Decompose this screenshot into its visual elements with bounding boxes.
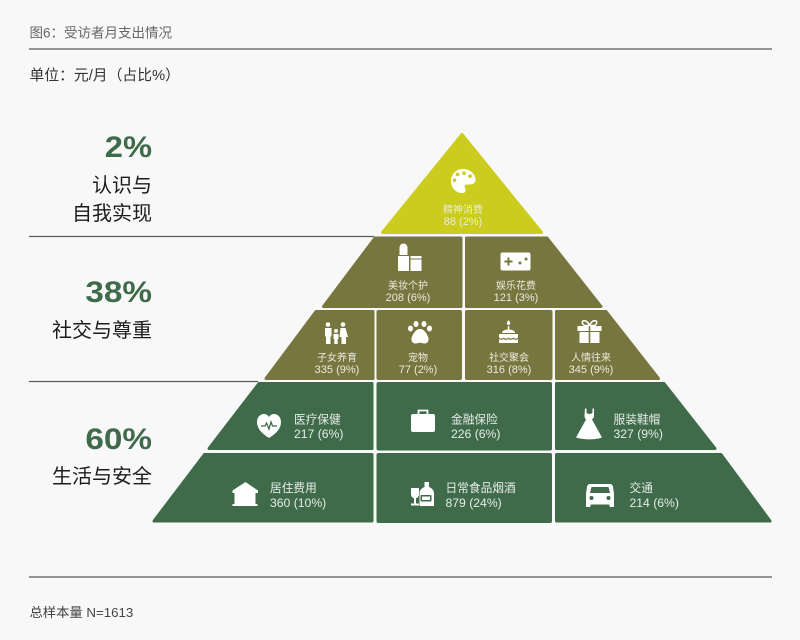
icon: game controller [500, 252, 530, 270]
label: clothing [614, 412, 663, 441]
label: spiritual spending: 精神消费 [443, 203, 483, 216]
label: healthcare: 217 (6%) [294, 427, 343, 441]
unit note: 单位：元/月（占比%） [30, 67, 180, 84]
label: gifts and favours [569, 351, 613, 376]
label: transport: 交通 [630, 481, 653, 495]
label: social gatherings: 社交聚会 [489, 351, 529, 364]
icon: briefcase [411, 410, 435, 432]
tier 2: gifts and favours [556, 312, 658, 378]
tier 3: transport [556, 454, 770, 521]
label: transport [630, 481, 679, 510]
label: childcare: 335 (9%) [315, 364, 359, 376]
label: healthcare [294, 412, 343, 441]
tier label: self-actualisation: 2% [105, 130, 152, 164]
tier label: social and respect: 38% [85, 275, 152, 309]
label: childcare: 子女养育 [317, 351, 357, 364]
label: pets: 宠物 [408, 351, 428, 364]
label: pets [399, 351, 437, 376]
tier 2: social gatherings [465, 310, 552, 380]
label: healthcare: 医疗保健 [294, 412, 341, 426]
tier label: self-actualisation: 自我实现 [72, 202, 152, 225]
icon: palette [451, 169, 476, 193]
label: finance and insurance [451, 412, 500, 441]
pyramid [154, 134, 770, 523]
tier label: social and respect [52, 275, 152, 342]
label: gifts and favours: 人情往来 [571, 351, 611, 364]
label: entertainment [494, 279, 538, 304]
label: clothing: 服装鞋帽 [614, 412, 660, 426]
tier 3: finance and insurance [376, 382, 552, 450]
label: food and drink: 879 (24%) [446, 496, 502, 510]
icon: cake [499, 320, 518, 343]
label: food and drink [446, 481, 516, 510]
tier label: life and safety: 60% [85, 422, 152, 456]
tier 1: spiritual spending [382, 134, 542, 232]
title: 图6：受访者月支出情况 [30, 26, 173, 40]
label: entertainment: 121 (3%) [494, 292, 538, 304]
label: beauty [386, 279, 430, 304]
icon: wine and bottle [411, 482, 434, 506]
icon: family [325, 322, 348, 344]
label: housing: 360 (10%) [270, 496, 326, 510]
icon: paw [408, 321, 432, 344]
icon: gift [578, 321, 602, 343]
label: gifts and favours: 345 (9%) [569, 364, 613, 376]
icon: lipstick [398, 244, 422, 271]
label: housing: 居住费用 [270, 481, 317, 495]
tier 2: beauty [324, 238, 461, 306]
label: social gatherings [487, 351, 531, 376]
tier 3: clothing [556, 384, 715, 448]
label: clothing: 327 (9%) [614, 427, 663, 441]
footer: sample size: 总样本量 N=1613 [30, 605, 133, 620]
tier label: self-actualisation [72, 130, 152, 225]
tier 3: food and drink [376, 453, 552, 523]
tier label: self-actualisation: 认识与 [92, 174, 152, 197]
label: beauty: 美妆个护 [388, 279, 428, 292]
tier 2: pets [376, 310, 462, 380]
tier 2: entertainment [466, 238, 601, 306]
icon: car [586, 484, 614, 507]
label: social gatherings: 316 (8%) [487, 364, 531, 376]
label: spiritual spending: 88 (2%) [444, 216, 482, 228]
label: finance and insurance: 226 (6%) [451, 427, 500, 441]
tier label: life and safety: 生活与安全 [52, 465, 152, 488]
label: beauty: 208 (6%) [386, 292, 430, 304]
label: pets: 77 (2%) [399, 364, 437, 376]
tier 3: housing [154, 454, 372, 521]
icon: house [232, 482, 258, 506]
icon: dress [576, 408, 602, 439]
label: transport: 214 (6%) [630, 496, 679, 510]
label: housing [270, 481, 326, 510]
tier label: life and safety [52, 422, 152, 488]
tier 2: childcare [266, 312, 373, 378]
tier label: social and respect: 社交与尊重 [52, 319, 152, 342]
label: childcare [315, 351, 359, 376]
label: spiritual spending [443, 203, 483, 228]
label: entertainment: 娱乐花费 [496, 279, 536, 292]
icon: heart [257, 414, 281, 438]
tier 3: healthcare [209, 384, 372, 448]
label: finance and insurance: 金融保险 [451, 412, 498, 426]
label: food and drink: 日常食品烟酒 [446, 481, 516, 495]
